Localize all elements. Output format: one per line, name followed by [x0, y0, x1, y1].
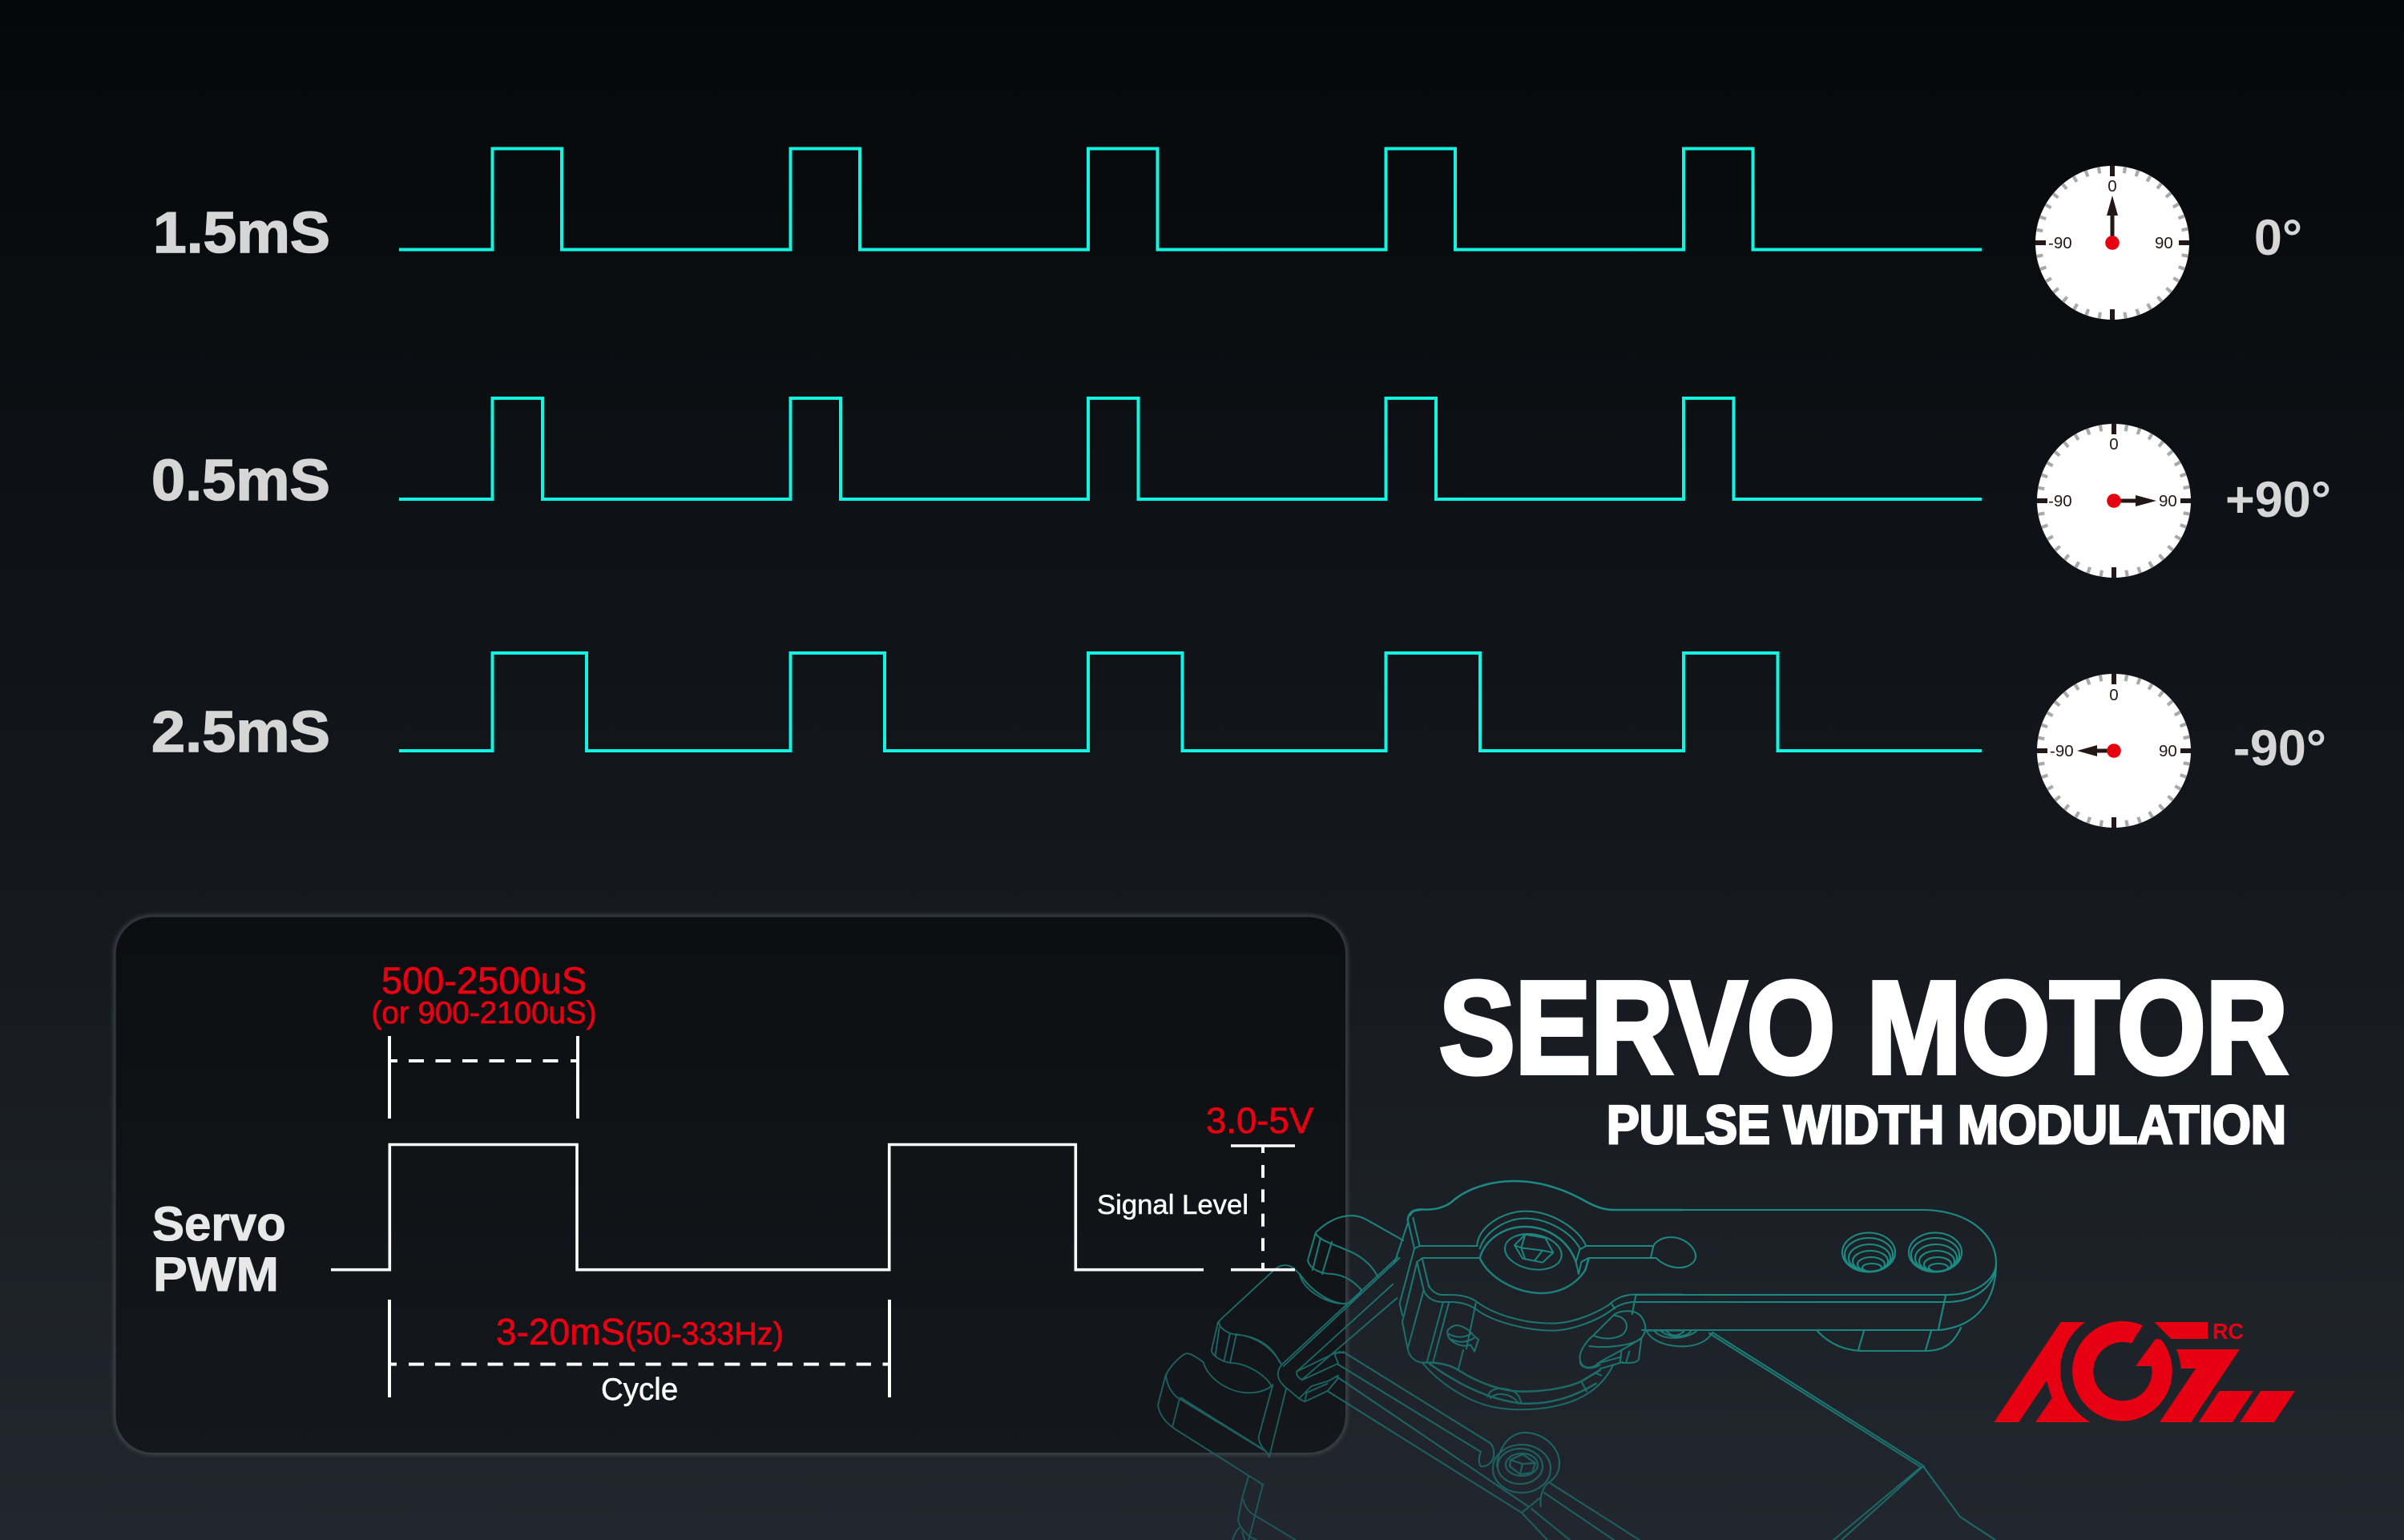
label: or 900-2100uS: (or 900-2100uS)	[372, 996, 596, 1030]
gauge: 0 degrees: -90	[2048, 234, 2072, 252]
waveform: 2.5mS pulse train	[399, 653, 1982, 751]
title: SERVO MOTOR: SERVO MOTOR	[1439, 954, 2288, 1101]
subtitle: PULSE WIDTH MODULATION: PULSE WIDTH MODULATION	[1607, 1095, 2286, 1155]
illustration: servo arm wireframe	[1158, 1181, 1996, 1540]
gauge: 0 degrees	[2035, 166, 2189, 320]
label: Servo PWM: PWM	[153, 1248, 279, 1301]
label: Cycle: Cycle	[601, 1373, 678, 1407]
dimension: cycle bracket	[389, 1300, 889, 1397]
logo: AGZ RC	[1994, 1319, 2295, 1422]
waveform: 1.5mS pulse train	[399, 149, 1982, 250]
gauge: +90 degrees: 90	[2159, 492, 2177, 510]
gauge: +90 degrees	[2037, 424, 2191, 578]
dimension: signal level	[1231, 1146, 1295, 1270]
label: 3.0-5V: 3.0-5V	[1206, 1100, 1314, 1141]
gauge: +90 degrees: 0	[2109, 435, 2119, 454]
gauge: -90 degrees: -90	[2050, 742, 2074, 760]
gauge: -90 degrees: 0	[2109, 686, 2119, 704]
gauge: 0 degrees: 90	[2155, 234, 2173, 252]
label: Servo PWM: Servo	[152, 1197, 286, 1251]
angle label: 0 degrees: 0°	[2254, 210, 2302, 266]
gauge: -90 degrees	[2037, 674, 2191, 828]
angle label: +90 degrees: +90°	[2225, 472, 2331, 528]
label: Servo PWM	[152, 1197, 286, 1301]
angle label: -90 degrees: -90°	[2233, 720, 2326, 776]
logo: AGZ RC: RC	[2212, 1319, 2244, 1344]
waveform: servo PWM signal	[331, 1144, 1204, 1270]
row label: 0.5mS: 0.5mS	[151, 449, 330, 513]
label: Signal Level: Signal Level	[1097, 1190, 1248, 1220]
panel: servo PWM diagram background	[115, 917, 1345, 1453]
row label: 2.5mS: 2.5mS	[151, 700, 330, 764]
gauge: +90 degrees: -90	[2048, 492, 2072, 510]
gauge: -90 degrees: 90	[2159, 742, 2177, 760]
row label: 1.5mS: 1.5mS	[153, 201, 330, 265]
label: 3-20mS (50-333Hz): 3-20mS(50-333Hz)	[496, 1311, 784, 1353]
dimension: pulse width bracket	[389, 1036, 578, 1119]
gauge: 0 degrees: 0	[2108, 177, 2117, 196]
label: 500-2500uS: 500-2500uS	[381, 959, 587, 1002]
waveform: 0.5mS pulse train	[399, 398, 1982, 499]
